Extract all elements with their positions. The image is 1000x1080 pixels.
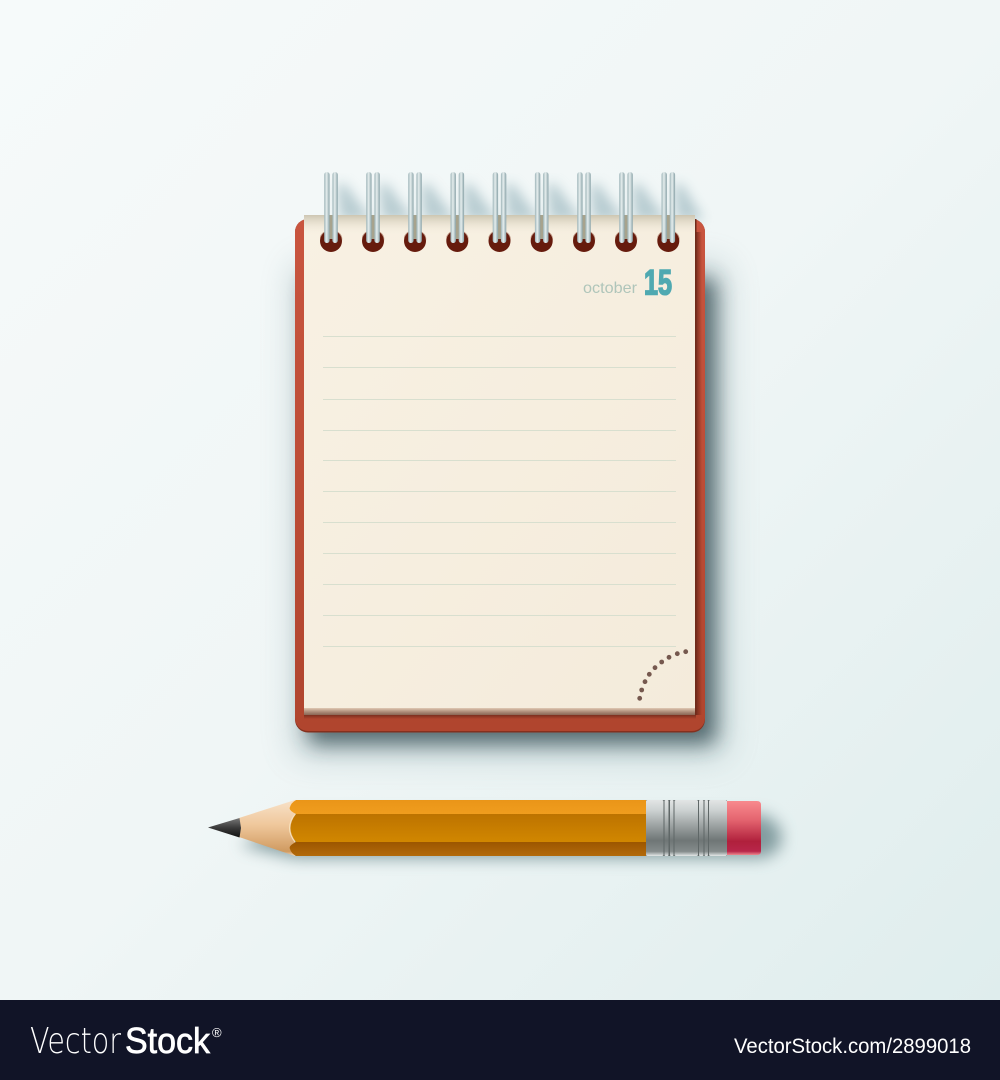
registered mark: ® bbox=[212, 1025, 222, 1040]
VectorStock logo: Vector bbox=[30, 1021, 121, 1062]
cover inner shadow under pages bbox=[304, 714, 696, 719]
notebook shadow bbox=[292, 184, 728, 758]
metal ferrule bbox=[646, 800, 727, 856]
VectorStock logo: Stock bbox=[125, 1020, 211, 1061]
coil 2 bbox=[362, 172, 384, 252]
paper page bbox=[304, 215, 696, 715]
cover flap shadow bbox=[696, 232, 702, 715]
image id: VectorStock.com/2899018 bbox=[734, 1035, 971, 1058]
red cover bbox=[295, 219, 705, 732]
ruled lines bbox=[323, 336, 676, 647]
wood tip bbox=[239, 800, 295, 856]
pink eraser bbox=[727, 801, 761, 855]
month: october bbox=[583, 280, 638, 297]
pencil body bbox=[290, 800, 646, 856]
pencil shadow bbox=[240, 815, 782, 858]
coil 6 bbox=[531, 172, 553, 252]
cover face bbox=[295, 219, 705, 731]
coil 5 bbox=[488, 172, 511, 252]
coil 7 bbox=[573, 172, 595, 252]
dotted corner curve bbox=[637, 649, 688, 701]
date label bbox=[583, 264, 672, 302]
paper page edges bbox=[304, 708, 695, 715]
coil 4 bbox=[446, 172, 469, 252]
spiral binding bbox=[320, 172, 680, 252]
graphite lead bbox=[208, 818, 241, 838]
day number: 15 bbox=[644, 264, 672, 302]
pencil bbox=[208, 800, 782, 858]
coil 8 bbox=[615, 172, 637, 252]
notebook bbox=[292, 172, 728, 758]
footer bar bbox=[0, 1000, 1000, 1080]
coil 3 bbox=[404, 172, 426, 252]
coil 1 bbox=[320, 172, 342, 252]
coil 9 bbox=[657, 172, 680, 252]
